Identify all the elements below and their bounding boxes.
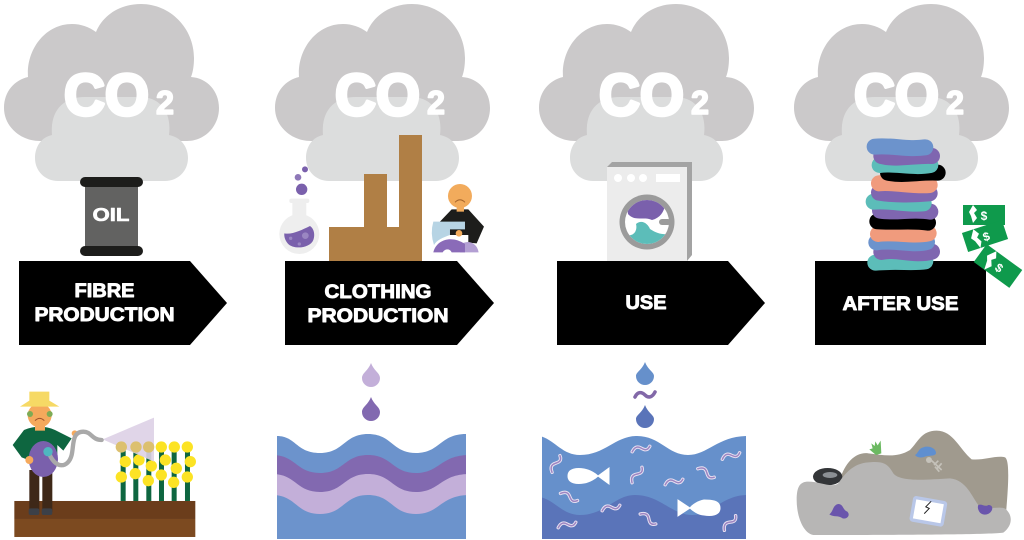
cloud: CO2: 2 <box>946 84 964 121</box>
banknote: $ <box>981 209 988 223</box>
cloud: CO2: CO <box>335 63 420 128</box>
icon: water drops <box>362 363 380 421</box>
arrow: fibre production <box>19 261 227 345</box>
panel: fibre production <box>4 4 227 537</box>
cloud: CO2 <box>4 4 219 181</box>
arrow: clothing production <box>285 261 494 345</box>
icon: drops with microfibre <box>635 362 655 428</box>
icon: farmer spraying crops <box>13 392 196 537</box>
arrow: use: USE <box>626 292 666 314</box>
icon: landfill heap <box>797 431 1011 535</box>
arrow: use <box>557 261 765 345</box>
soil <box>14 501 195 537</box>
chart: water with microfibres and fish <box>540 436 748 540</box>
icon: oil barrel <box>80 177 143 256</box>
icon: chemical flask <box>279 166 319 254</box>
cloud: CO2: 2 <box>427 84 445 121</box>
fish <box>678 500 720 516</box>
panel: use <box>539 4 765 540</box>
banknote: $ <box>981 229 992 244</box>
arrow: fibre production: PRODUCTION <box>34 304 174 326</box>
banknote: $ <box>992 260 1006 276</box>
microfibres <box>549 446 740 530</box>
cloud: CO2 <box>275 4 490 181</box>
cloud: CO2 <box>794 4 1009 181</box>
arrow: fibre production: FIBRE <box>74 280 134 302</box>
spray <box>103 418 154 462</box>
panel: after use <box>794 4 1022 535</box>
cloud: CO2: CO <box>64 63 149 128</box>
icon: stack of clothes <box>874 146 938 263</box>
crops <box>116 441 196 501</box>
icon: factory <box>329 135 422 261</box>
box: after use <box>815 261 986 345</box>
fish <box>568 468 609 484</box>
cloud: CO2: 2 <box>156 84 174 121</box>
arrow: clothing production: CLOTHING <box>324 281 432 303</box>
farmer <box>13 392 102 515</box>
icon: oil barrel: OIL <box>92 205 130 225</box>
icon: garment worker <box>432 184 484 252</box>
icon: torn banknotes <box>962 205 1022 288</box>
cloud: CO2 <box>539 4 754 181</box>
box: after use: AFTER USE <box>842 293 958 315</box>
cloud: CO2: 2 <box>691 84 709 121</box>
chart: polluted water bands <box>277 434 466 539</box>
cloud: CO2: CO <box>854 63 939 128</box>
icon: washing machine <box>607 162 692 261</box>
panel: clothing production <box>272 4 494 540</box>
arrow: clothing production: PRODUCTION <box>308 305 448 327</box>
cloud: CO2: CO <box>599 63 684 128</box>
